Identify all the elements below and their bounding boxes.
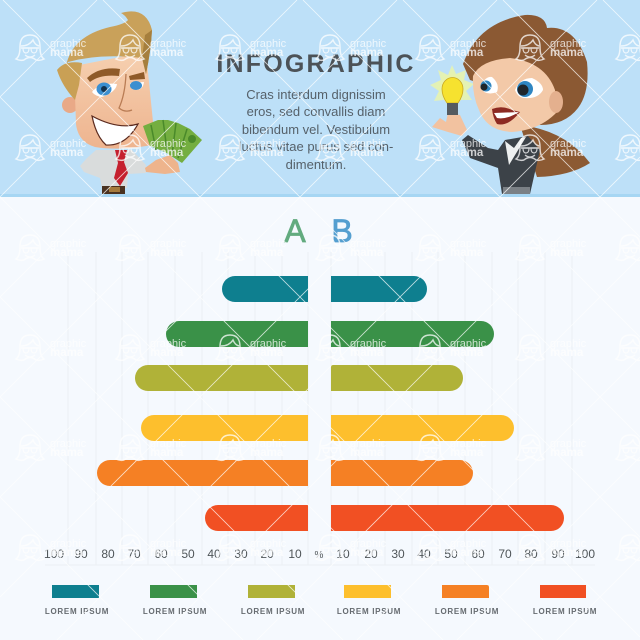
watermark overlay: mama	[350, 147, 384, 159]
percentage axis labels: 40	[207, 547, 221, 561]
intro paragraph: bibendum vel. Vestibulum	[242, 122, 390, 137]
legend item 5: LOREM IPSUM	[435, 607, 499, 616]
intro paragraph: luctus vitae purus sed con-	[239, 139, 393, 154]
percentage axis labels: 80	[524, 547, 538, 561]
diverging bar chart	[97, 276, 564, 531]
watermark overlay: graphic	[50, 338, 87, 350]
watermark overlay: graphic	[350, 338, 387, 350]
watermark overlay: mama	[350, 447, 384, 459]
watermark overlay: graphic	[550, 538, 587, 550]
watermark overlay: graphic	[550, 338, 587, 350]
watermark overlay: graphic	[250, 38, 287, 50]
watermark overlay: graphic	[450, 338, 487, 350]
percentage axis labels: 70	[498, 547, 512, 561]
watermark overlay: mama	[150, 147, 184, 159]
watermark overlay: graphic	[450, 138, 487, 150]
watermark overlay: graphic	[150, 238, 187, 250]
heading: series B: B	[331, 213, 353, 249]
watermark overlay: mama	[150, 447, 184, 459]
watermark overlay: mama	[550, 347, 584, 359]
bars: red	[205, 505, 564, 531]
title: INFOGRAPHIC	[216, 50, 416, 78]
percentage axis labels: 100	[575, 547, 595, 561]
watermark overlay: mama	[150, 547, 184, 559]
illustration: businessman holding money	[57, 11, 202, 194]
percentage axis labels: %	[315, 550, 324, 561]
watermark overlay: graphic	[550, 38, 587, 50]
watermark overlay: graphic	[550, 138, 587, 150]
percentage axis labels	[44, 547, 595, 561]
percentage axis labels: 90	[74, 547, 88, 561]
watermark overlay: mama	[450, 547, 484, 559]
watermark overlay: graphic	[350, 138, 387, 150]
intro paragraph: Cras interdum dignissim	[246, 87, 386, 102]
watermark overlay: mama	[350, 347, 384, 359]
percentage axis labels: 40	[417, 547, 431, 561]
bars: orange	[97, 460, 473, 486]
legend item 6: LOREM IPSUM	[533, 607, 597, 616]
watermark overlay: graphic	[50, 538, 87, 550]
watermark overlay: graphic	[350, 538, 387, 550]
watermark overlay: graphic	[50, 238, 87, 250]
percentage axis labels: 100	[44, 547, 64, 561]
watermark overlay: mama	[50, 547, 84, 559]
heading: series A: A	[284, 213, 306, 249]
percentage axis labels: 60	[154, 547, 168, 561]
watermark overlay: mama	[50, 447, 84, 459]
watermark overlay: graphic	[550, 438, 587, 450]
watermark overlay: graphic	[350, 238, 387, 250]
watermark overlay: graphic	[250, 538, 287, 550]
legend item 6	[533, 585, 597, 616]
watermark overlay: graphic	[150, 38, 187, 50]
watermark overlay: mama	[450, 347, 484, 359]
percentage axis labels: 30	[391, 547, 405, 561]
chart gridlines	[45, 252, 595, 565]
bars: yellow	[141, 415, 514, 441]
watermark overlay: mama	[550, 247, 584, 259]
watermark overlay: mama	[50, 247, 84, 259]
percentage axis labels: 20	[364, 547, 378, 561]
watermark overlay: mama	[250, 47, 284, 59]
watermark overlay: mama	[550, 47, 584, 59]
watermark overlay: mama	[250, 147, 284, 159]
watermark overlay: mama	[150, 47, 184, 59]
watermark overlay: mama	[50, 347, 84, 359]
watermark overlay: graphic	[450, 238, 487, 250]
legend item 5	[435, 585, 499, 616]
percentage axis labels: 50	[181, 547, 195, 561]
legend item 1	[45, 585, 109, 616]
illustration: businesswoman holding a light bulb	[430, 15, 590, 194]
watermark overlay: mama	[50, 147, 84, 159]
watermark overlay: graphic	[150, 338, 187, 350]
watermark overlay: mama	[350, 247, 384, 259]
legend item 3: LOREM IPSUM	[241, 607, 305, 616]
watermark overlay: graphic	[350, 38, 387, 50]
watermark overlay: graphic	[450, 538, 487, 550]
watermark overlay: mama	[250, 247, 284, 259]
header band	[0, 0, 640, 197]
watermark overlay: mama	[350, 547, 384, 559]
watermark overlay: graphic	[350, 438, 387, 450]
watermark overlay: graphic	[550, 238, 587, 250]
legend item 3	[241, 585, 305, 616]
percentage axis labels: 80	[101, 547, 115, 561]
watermark overlay: mama	[550, 447, 584, 459]
watermark overlay: graphic	[450, 38, 487, 50]
watermark overlay: mama	[550, 547, 584, 559]
watermark overlay: graphic	[50, 38, 87, 50]
legend item 2: LOREM IPSUM	[143, 607, 207, 616]
watermark overlay: mama	[250, 547, 284, 559]
watermark overlay: graphic	[150, 438, 187, 450]
watermark overlay: mama	[550, 147, 584, 159]
legend item 1: LOREM IPSUM	[45, 607, 109, 616]
percentage axis labels: 60	[471, 547, 485, 561]
intro paragraph	[239, 87, 393, 172]
watermark overlay: mama	[450, 447, 484, 459]
watermark overlay: mama	[250, 447, 284, 459]
watermark overlay: mama	[150, 347, 184, 359]
watermark overlay: graphic	[50, 138, 87, 150]
percentage axis labels: 20	[260, 547, 274, 561]
watermark overlay: mama	[450, 247, 484, 259]
percentage axis labels: 90	[551, 547, 565, 561]
watermark overlay: graphic	[250, 138, 287, 150]
bars: green	[166, 321, 494, 347]
watermark overlay: graphic	[150, 538, 187, 550]
watermark overlay: mama	[450, 47, 484, 59]
percentage axis labels: 70	[127, 547, 141, 561]
watermark overlay: mama	[150, 247, 184, 259]
percentage axis labels: 10	[288, 547, 302, 561]
watermark overlay: mama	[50, 47, 84, 59]
watermark overlay: graphic	[150, 138, 187, 150]
legend item 4	[337, 585, 401, 616]
intro paragraph: eros, sed convallis diam	[247, 104, 385, 119]
watermark overlay: mama	[350, 47, 384, 59]
legend item 2	[143, 585, 207, 616]
percentage axis labels: 10	[336, 547, 350, 561]
legend item 4: LOREM IPSUM	[337, 607, 401, 616]
watermark overlay: graphic	[250, 438, 287, 450]
bars: olive	[135, 365, 463, 391]
watermark overlay: mama	[450, 147, 484, 159]
watermark overlay: mama	[250, 347, 284, 359]
legend	[45, 585, 597, 616]
percentage axis labels: 30	[234, 547, 248, 561]
watermark overlay: graphic	[450, 438, 487, 450]
watermark overlay: graphic	[250, 238, 287, 250]
watermark overlay: graphic	[250, 338, 287, 350]
bars: teal	[222, 276, 427, 302]
intro paragraph: dimentum.	[286, 157, 346, 172]
percentage axis labels: 50	[444, 547, 458, 561]
watermark overlay: graphic	[50, 438, 87, 450]
